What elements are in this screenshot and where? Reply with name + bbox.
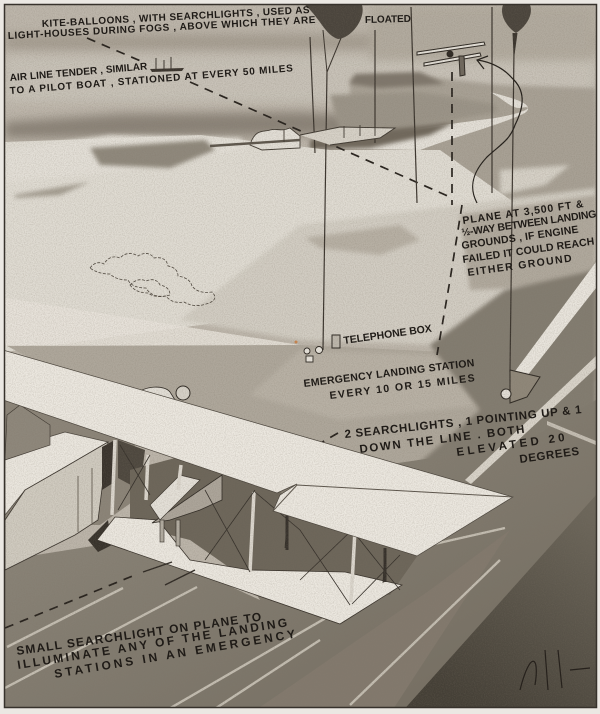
icon: emergency station searchlight (294, 340, 322, 362)
icon: biplane at 3,500 ft (417, 42, 485, 76)
light plains (5, 135, 596, 352)
label: kite balloons (8, 5, 411, 42)
label: small searchlight on plane: SMALL SEARCHLIGHT ON PLANE TO (15, 610, 262, 658)
dashed air route (5, 38, 462, 628)
wing struts and rigging (112, 440, 400, 605)
balloon cables (310, 7, 514, 372)
searchlight beams (5, 262, 596, 484)
label: plane at 3,500 ft: ½-WAY BETWEEN LANDING (461, 208, 597, 239)
icon: air line tender boat (150, 57, 184, 72)
label: kite balloons: LIGHT-HOUSES DURING FOGS , ABOVE WHICH THEY ARE (8, 15, 316, 42)
lower wing (97, 517, 402, 624)
label: emergency landing station: EVERY 10 OR 15 MILES (329, 372, 475, 402)
label: emergency landing station: EMERGENCY LANDING STATION (303, 357, 475, 390)
label: two searchlights: ELEVATED 20 (456, 432, 565, 459)
icon: ground searchlight unit (501, 370, 540, 403)
label: two searchlights: 2 SEARCHLIGHTS , 1 POINTING UP & 1 (344, 404, 583, 441)
icon: kite balloon 2 (502, 5, 531, 55)
runway stripes (5, 528, 505, 714)
label: small searchlight on plane: STATIONS IN AN EMERGENCY (53, 627, 296, 681)
lower fields (5, 260, 596, 714)
label: two searchlights (344, 404, 583, 466)
icon: kite balloon 1 (305, 5, 363, 72)
wing top detail (273, 485, 513, 511)
arrow: curve from plane label to plane (473, 56, 522, 203)
label: plane at 3,500 ft: EITHER GROUND (467, 252, 573, 279)
label: two searchlights: DEGREES (519, 446, 580, 466)
coastal land and river (308, 70, 596, 200)
woods on the plain (90, 253, 215, 306)
label: plane at 3,500 ft: GROUNDS , IF ENGINE (461, 224, 579, 252)
upper wing (3, 350, 513, 556)
label: plane at 3,500 ft: PLANE AT 3,500 FT & (462, 198, 585, 227)
shadow between the wings (130, 450, 418, 595)
label: kite balloons: FLOATED (365, 14, 411, 26)
label: kite balloons: KITE-BALLOONS , WITH SEARCHLIGHTS , USED AS (42, 5, 310, 30)
nacelle and engine (135, 386, 222, 546)
label: telephone box: TELEPHONE BOX (343, 323, 433, 347)
label: small searchlight on plane: ILLUMINATE ANY OF THE LANDING (16, 615, 288, 672)
label: plane at 3,500 ft: FAILED IT COULD REACH (462, 236, 595, 266)
town on the coast (210, 125, 395, 150)
artist signature (520, 650, 590, 690)
label: two searchlights: DOWN THE LINE . BOTH (359, 424, 525, 456)
icon: telephone box (332, 335, 340, 348)
sky bands (5, 5, 596, 150)
label: air line tender: AIR LINE TENDER , SIMILAR (9, 61, 149, 84)
label: plane at 3,500 ft (461, 198, 597, 279)
label: air line tender: TO A PILOT BOAT , STATIONED AT EVERY 50 MILES (9, 63, 294, 97)
plane fuselage (5, 400, 145, 570)
